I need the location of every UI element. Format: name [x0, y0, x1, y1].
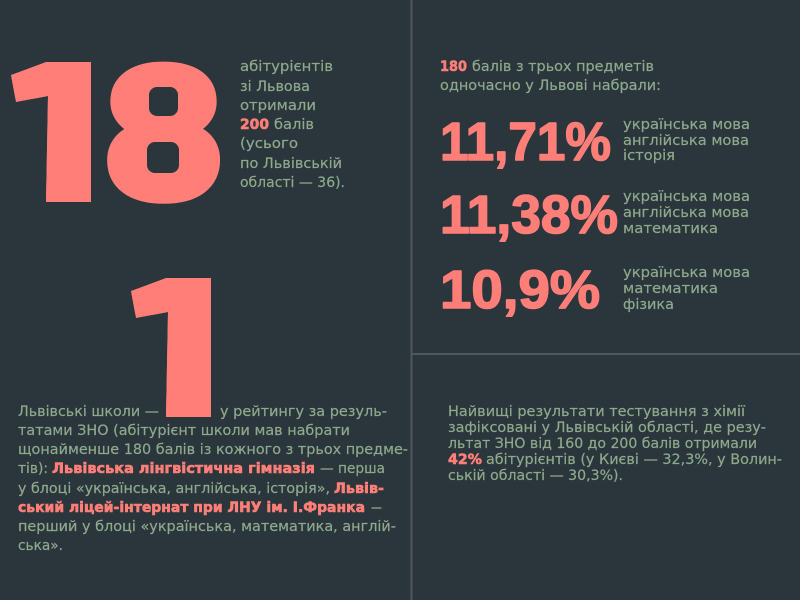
panel: chemistry results: 42% [448, 452, 482, 468]
text: schools description: у рейтингу за резуль- [220, 404, 387, 420]
stat: 11,71% [440, 112, 750, 172]
text: applicants description: абітурієнтів [240, 59, 333, 75]
stat: 10,9%: фізика [623, 297, 674, 313]
stat: 11,38%: англійська мова [623, 205, 749, 221]
text: schools description: татами ЗНО (абітурієнт школи мав набрати [18, 423, 350, 439]
panel: chemistry results: абітурієнтів (у Києві — 32,3%, у Волин- [486, 452, 782, 468]
stat: 10,9%: математика [623, 281, 718, 297]
panel: chemistry results: льтат ЗНО від 160 до 200 балів отримали [448, 436, 757, 452]
text: applicants description: (усього [240, 136, 298, 152]
big number 18: 8 [108, 32, 218, 234]
text: applicants description [240, 59, 345, 191]
text: applicants description: по Львівській [240, 156, 342, 172]
text: applicants description: балів [274, 117, 314, 133]
stat: 11,71%: історія [623, 148, 675, 164]
stat: 11,38%: математика [623, 221, 718, 237]
text: schools description [18, 404, 408, 554]
heading: одночасно у Львові набрали: [440, 78, 661, 94]
text: schools description: перший у блоці «українська, математика, англій- [18, 519, 396, 535]
text: schools description: Львівські школи — [18, 404, 159, 420]
text: schools description: у блоці «українська, англійська, історія», [18, 481, 330, 497]
text: schools description: тів): [18, 461, 48, 477]
big number 18 [11, 62, 220, 204]
text: schools description: Львів- [334, 481, 384, 497]
heading: 180 [440, 59, 467, 75]
big number 1: 1 [90, 240, 240, 459]
heading [440, 59, 661, 94]
panel: chemistry results: ській області — 30,3%). [448, 468, 623, 484]
text: applicants description: 200 [240, 117, 269, 133]
stat: 11,71%: 11,71% [440, 112, 611, 172]
panel: 18 applicants [11, 60, 344, 204]
panel: chemistry results: зафіксовані у Львівській області, де резу- [448, 420, 766, 436]
stat: 11,38%: 11,38% [440, 185, 618, 245]
stat: 10,9%: 10,9% [440, 260, 600, 320]
stat: 11,38%: українська мова [623, 189, 750, 205]
text: applicants description: отримали [240, 98, 316, 114]
stat: 11,38% [440, 185, 750, 245]
stat: 10,9% [440, 260, 750, 320]
text: schools description: ський ліцей-інтернат при ЛНУ ім. І.Франка [18, 500, 365, 516]
panel: 180 points in three subjects [440, 59, 750, 320]
panel: chemistry results: Найвищі результати тестування з хімії [448, 404, 746, 420]
text: schools description: Львівська лінгвістична гімназія [52, 461, 315, 477]
text: schools description: — [371, 500, 382, 516]
stat: 10,9%: українська мова [623, 265, 750, 281]
stat: 11,71%: англійська мова [623, 133, 749, 149]
text: schools description: щонайменше 180 балів із кожного з трьох предме- [18, 442, 408, 458]
text: schools description: ська». [18, 538, 63, 554]
panel: chemistry results [448, 404, 782, 484]
text: applicants description: області — 36). [240, 175, 345, 191]
panel: schools ranking [18, 278, 408, 550]
text: schools description: — перша [320, 461, 385, 477]
heading: балів з трьох предметів [472, 59, 654, 75]
stat: 11,71%: українська мова [623, 117, 750, 133]
text: applicants description: зі Львова [240, 79, 310, 95]
